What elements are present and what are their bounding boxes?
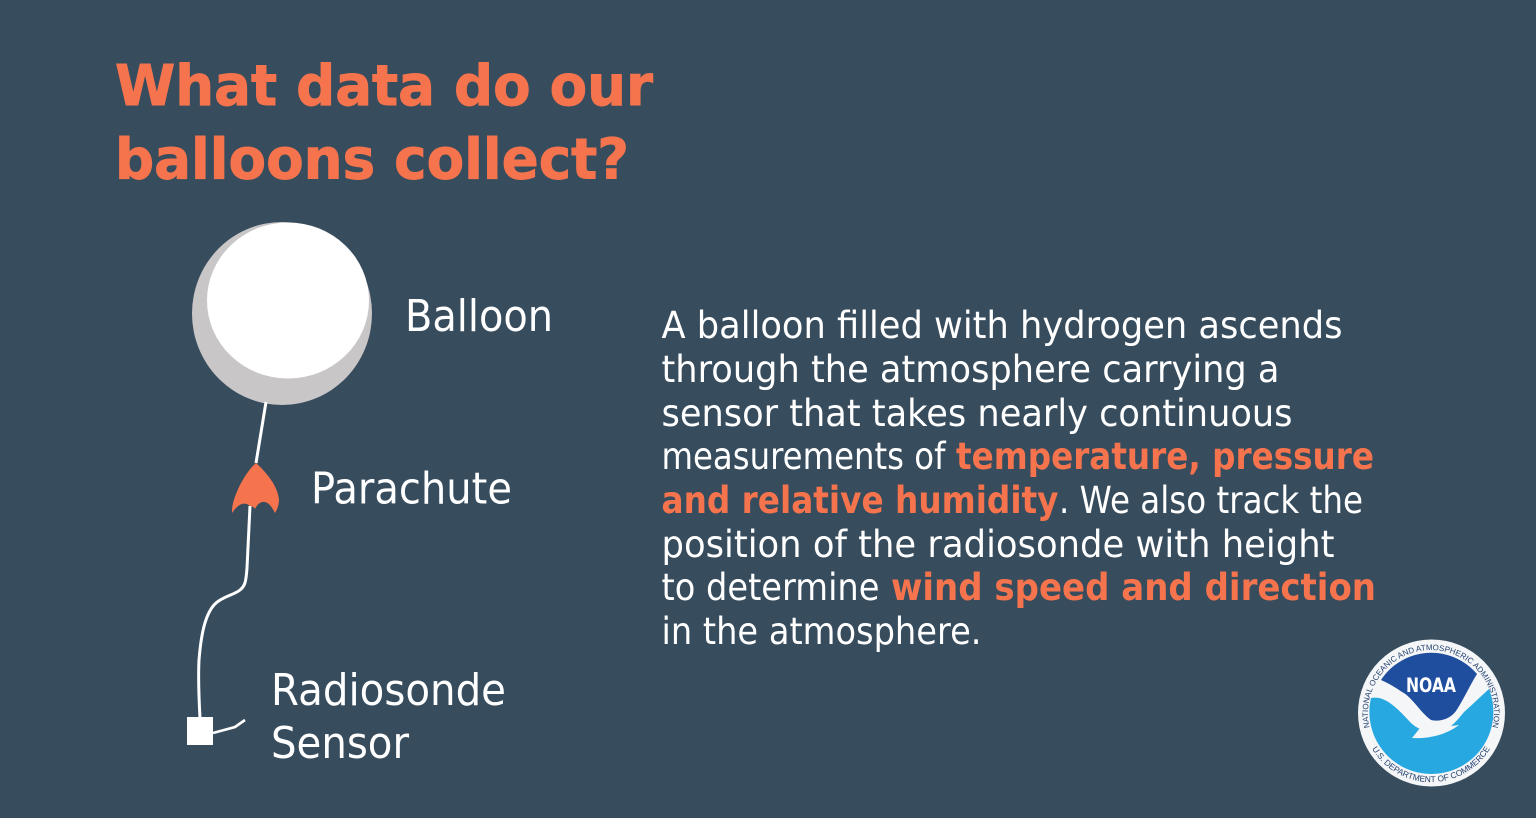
label: radiosonde sensor: Radiosonde bbox=[271, 665, 506, 716]
description text: to determine bbox=[662, 566, 880, 609]
sensor cable bbox=[199, 506, 250, 718]
balloon line bbox=[256, 402, 266, 463]
description text: through the atmosphere carrying a bbox=[662, 348, 1280, 391]
icon: balloon bbox=[192, 222, 372, 405]
description text: wind speed and direction bbox=[891, 566, 1376, 609]
icon: radiosonde sensor bbox=[187, 717, 245, 745]
description text: sensor that takes nearly continuous bbox=[662, 392, 1292, 435]
description text: and relative humidity bbox=[662, 479, 1058, 522]
title: What data do our bbox=[115, 54, 653, 119]
icon: NOAA logo bbox=[1358, 640, 1505, 786]
title: balloons collect? bbox=[115, 128, 629, 192]
icon: NOAA logo: NATIONAL OCEANIC AND ATMOSPHERIC ADMINISTRATION bbox=[1362, 644, 1500, 728]
description text bbox=[662, 304, 1376, 653]
label: balloon: Balloon bbox=[405, 291, 553, 342]
icon: parachute bbox=[232, 463, 279, 513]
description text: . We also track the bbox=[1059, 479, 1363, 522]
description text: measurements of bbox=[662, 435, 946, 478]
icon: NOAA logo: NOAA bbox=[1406, 674, 1456, 697]
description text: in the atmosphere. bbox=[662, 610, 982, 653]
description text: temperature, pressure bbox=[956, 435, 1374, 478]
description text: A balloon filled with hydrogen ascends bbox=[662, 304, 1342, 347]
title bbox=[115, 54, 653, 192]
description text: position of the radiosonde with height bbox=[662, 523, 1334, 566]
label: parachute: Parachute bbox=[311, 464, 512, 514]
icon: NOAA logo: U.S. DEPARTMENT OF COMMERCE bbox=[1373, 746, 1490, 782]
label: radiosonde sensor: Sensor bbox=[271, 718, 410, 769]
label: radiosonde sensor bbox=[271, 665, 506, 769]
